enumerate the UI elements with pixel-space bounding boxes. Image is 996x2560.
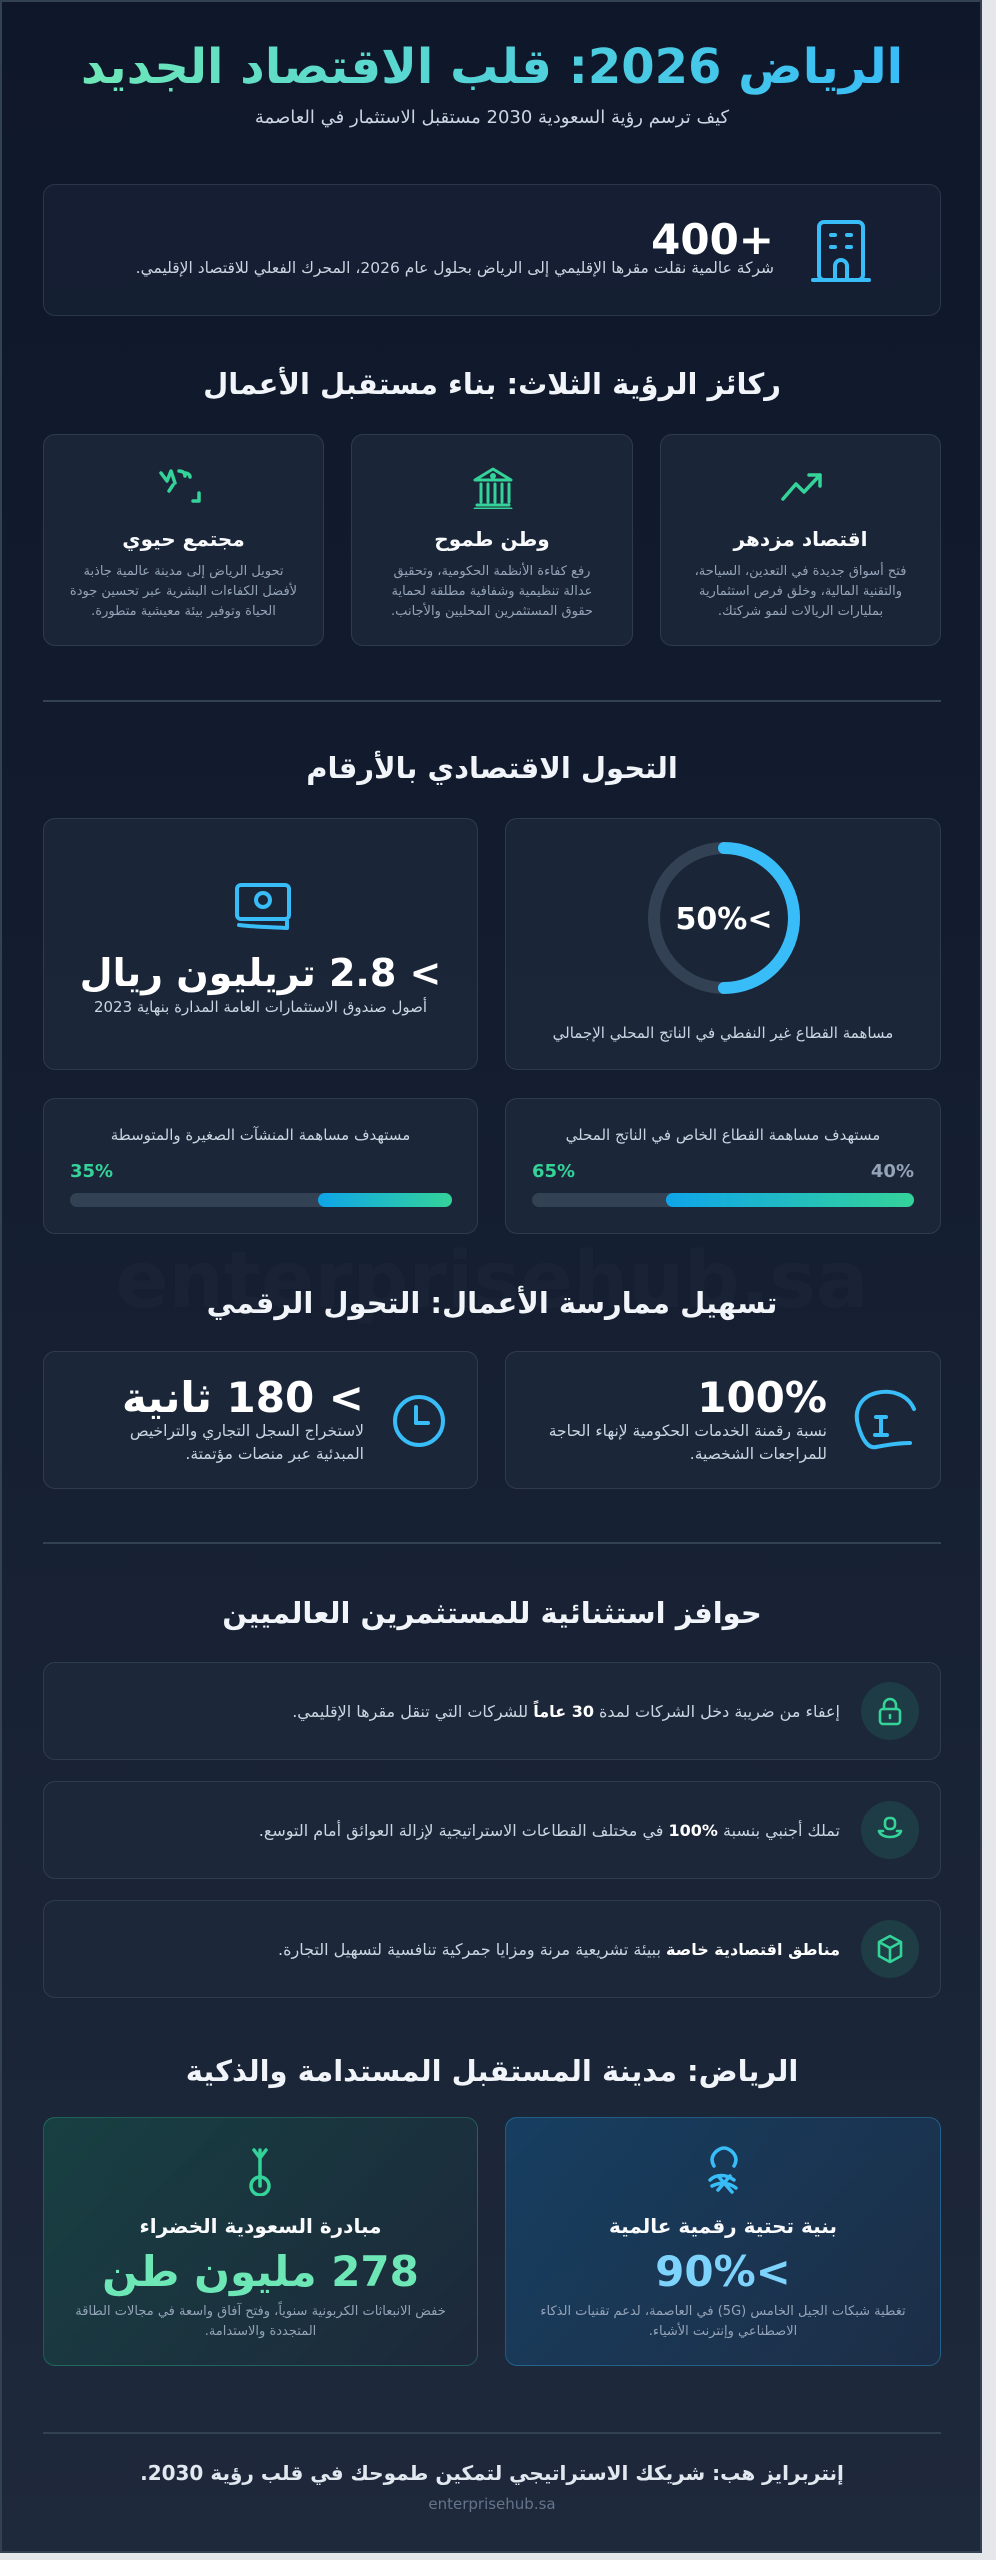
card value: مليون طن [102, 2247, 317, 2296]
icon: building [811, 220, 871, 282]
pillar title: وطن طموح [434, 527, 550, 551]
icon: money [235, 883, 291, 930]
icon: trend up [781, 473, 822, 501]
donut chart [648, 842, 800, 994]
incentive text: مناطق اقتصادية خاصة [666, 1940, 840, 1958]
stat value: 2.8 < [329, 951, 441, 995]
card value: 278 [331, 2247, 419, 2296]
heading: incentives: حوافز استثنائية للمستثمرين العالميين [222, 1596, 762, 1630]
donut chart: 50%< [676, 902, 772, 937]
pillar desc: فتح أسواق جديدة في التعدين، السياحة، والتقنية المالية، وخلق فرص استثمارية بمليارات الريالات لنمو شركتك. [695, 564, 906, 619]
incentive text: 100% [669, 1820, 718, 1840]
progress bar [532, 1193, 914, 1207]
stat value [122, 1373, 364, 1422]
incentive row: foreign ownership [43, 1781, 941, 1879]
stat value: 400+ [651, 215, 774, 264]
pillar title: اقتصاد مزدهر [734, 527, 867, 551]
watermark: enterprisehub.sa [115, 1236, 869, 1326]
stat value: ثانية [122, 1373, 212, 1422]
stat description: نسبة رقمنة الخدمات الحكومية لإنهاء الحاجة للمراجعات الشخصية. [549, 1422, 827, 1463]
icon: digital hand [854, 1390, 916, 1450]
panel: digital infrastructure [505, 2117, 941, 2366]
progress label: مستهدف مساهمة المنشآت الصغيرة والمتوسطة [111, 1126, 410, 1144]
panel: 100% digitization [505, 1351, 941, 1489]
heading: economic numbers: التحول الاقتصادي بالأرقام [306, 751, 678, 785]
icon: box [861, 1920, 919, 1978]
icon: ownership [861, 1801, 919, 1859]
incentive row: special zones [43, 1900, 941, 1998]
stat value: 100% [697, 1373, 827, 1422]
icon: network [708, 2146, 738, 2194]
stat description: شركة عالمية نقلت مقرها الإقليمي إلى الرياض بحلول عام 2026، المحرك الفعلي للاقتصاد الإقليمي. [136, 259, 774, 277]
card desc: تغطية شبكات الجيل الخامس (5G) في العاصمة، لدعم تقنيات الذكاء الاصطناعي وإنترنت الأشياء. [540, 2304, 906, 2339]
icon: community [159, 469, 201, 503]
subtitle: كيف ترسم رؤية السعودية 2030 مستقبل الاستثمار في العاصمة [255, 107, 729, 128]
current value: 40% [871, 1161, 914, 1182]
card title: مبادرة السعودية الخضراء [139, 2214, 382, 2238]
incentive text [278, 1940, 840, 1959]
pillar title: مجتمع حيوي [122, 527, 245, 551]
panel: green initiative [43, 2117, 478, 2366]
panel: pillar society [43, 434, 324, 646]
panel: SME progress [43, 1098, 478, 1234]
stat value: 180 < [227, 1373, 364, 1422]
stat description: أصول صندوق الاستثمارات العامة المدارة بنهاية 2023 [94, 998, 427, 1016]
icon: lock [861, 1682, 919, 1740]
target value: 65% [532, 1161, 575, 1182]
card value: 90%< [655, 2247, 791, 2296]
card title: بنية تحتية رقمية عالمية [609, 2214, 837, 2238]
icon: government building [474, 468, 513, 509]
progress label: مستهدف مساهمة القطاع الخاص في الناتج المحلي [566, 1126, 880, 1144]
stat value [80, 951, 441, 996]
panel: PIF assets [43, 818, 478, 1070]
panel: private sector progress [505, 1098, 941, 1234]
stat description: لاستخراج السجل التجاري والتراخيص المبدئية عبر منصات مؤتمتة. [130, 1422, 364, 1463]
card value [102, 2247, 419, 2296]
target value: 35% [70, 1161, 113, 1182]
incentive text: ببيئة تشريعية مرنة ومزايا جمركية تنافسية لتسهيل التجارة. [278, 1940, 661, 1958]
incentive row: tax exemption [43, 1662, 941, 1760]
panel: pillar nation [351, 434, 633, 646]
icon: sprout [249, 2148, 271, 2196]
heading: sustainable city: الرياض: مدينة المستقبل المستدامة والذكية [186, 2054, 798, 2088]
panel: 180 seconds [43, 1351, 478, 1489]
panel: pillar economy [660, 434, 941, 646]
footer tagline: إنتربرايز هب: شريكك الاستراتيجي لتمكين طموحك في قلب رؤية 2030. [140, 2461, 844, 2485]
heading: digital transformation: تسهيل ممارسة الأعمال: التحول الرقمي [207, 1286, 777, 1320]
card desc: خفض الانبعاثات الكربونية سنوياً، وفتح آفاق واسعة في مجالات الطاقة المتجددة والاستدامة. [75, 2304, 446, 2339]
footer url: enterprisehub.sa [428, 2495, 556, 2513]
panel: 400+ companies [43, 184, 941, 316]
title: الرياض 2026: قلب الاقتصاد الجديد [81, 39, 903, 95]
pillar desc: تحويل الرياض إلى مدينة عالمية جاذبة لأفضل الكفاءات البشرية عبر تحسين جودة الحياة وتوفير بيئة معيشية متطورة. [70, 564, 297, 619]
incentive text: إعفاء من ضريبة دخل الشركات لمدة للشركات التي تنقل مقرها الإقليمي. [292, 1702, 840, 1720]
progress bar [70, 1193, 452, 1207]
icon: clock [393, 1395, 445, 1447]
incentive text: تملك أجنبي بنسبة في مختلف القطاعات الاستراتيجية لإزالة العوائق أمام التوسع. [259, 1820, 840, 1840]
caption: مساهمة القطاع غير النفطي في الناتج المحلي الإجمالي [553, 1024, 893, 1042]
panel: non-oil GDP donut [505, 818, 941, 1070]
stat value: تريليون ريال [80, 951, 316, 995]
heading: pillars: ركائز الرؤية الثلاث: بناء مستقبل الأعمال [203, 367, 781, 401]
incentive text: 30 عاماً [533, 1702, 594, 1720]
pillar desc: رفع كفاءة الأنظمة الحكومية، وتحقيق عدالة تنظيمية وشفافية مطلقة لحماية حقوق المستثمرين المحليين والأجانب. [391, 564, 593, 619]
